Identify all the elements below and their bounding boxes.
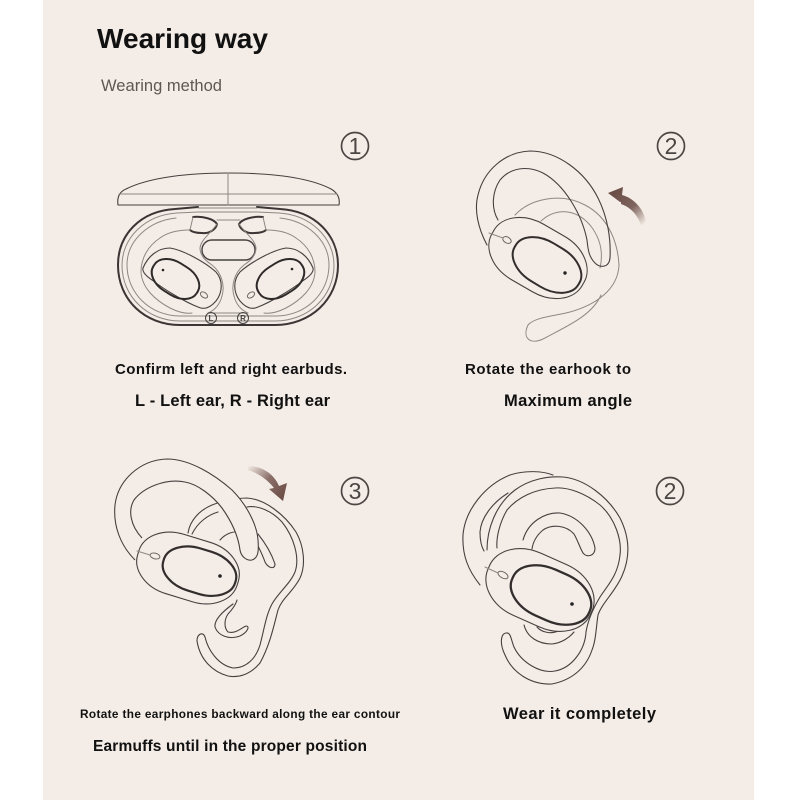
earbud body	[475, 536, 605, 644]
panel: step 2 rotate earhook illustration	[476, 151, 646, 341]
step 2 caption line 2: Maximum angle	[504, 392, 632, 410]
right earbud	[233, 217, 315, 313]
earbud body	[477, 204, 599, 312]
step 1 caption line 1: Confirm left and right earbuds.	[115, 361, 347, 378]
panel: step 3 rotate backward illustration	[115, 459, 303, 677]
arrow: rotate backward	[248, 466, 287, 501]
title: Wearing way	[97, 23, 268, 54]
R marker	[238, 312, 248, 324]
panel: step 1 charging case illustration	[118, 173, 339, 325]
L marker: L	[209, 314, 214, 323]
ear outline	[188, 498, 303, 677]
left earbud	[141, 217, 223, 313]
ear outline	[487, 477, 628, 684]
case body	[118, 207, 338, 325]
earhook behind ear	[463, 472, 553, 585]
arrow: rotate up	[608, 187, 646, 225]
center pill	[202, 240, 255, 260]
panel: step 4 worn earbud illustration	[463, 472, 628, 684]
case lid	[118, 173, 339, 205]
ghost earhook position	[515, 198, 619, 341]
step number 3: 3	[349, 478, 361, 504]
R marker: R	[240, 314, 246, 323]
subtitle: Wearing method	[101, 77, 222, 95]
step number 2 (second)	[656, 478, 684, 504]
step number 2	[658, 132, 684, 160]
earbud body	[129, 523, 247, 613]
step 3 caption line 2: Earmuffs until in the proper position	[93, 738, 367, 755]
step number 1	[342, 132, 368, 160]
step 4 caption: Wear it completely	[503, 705, 657, 723]
L marker	[206, 312, 216, 324]
step 2 caption line 1: Rotate the earhook to	[465, 361, 631, 378]
step 1 caption line 2: L - Left ear, R - Right ear	[135, 392, 331, 410]
step number 3	[342, 478, 368, 504]
step number 2: 2	[665, 133, 677, 159]
step number 1: 1	[349, 133, 361, 159]
step number 2 (second): 2	[664, 478, 676, 504]
step 3 caption line 1: Rotate the earphones backward along the ear contour	[80, 707, 400, 721]
earhook	[115, 459, 258, 560]
earhook	[476, 151, 610, 266]
